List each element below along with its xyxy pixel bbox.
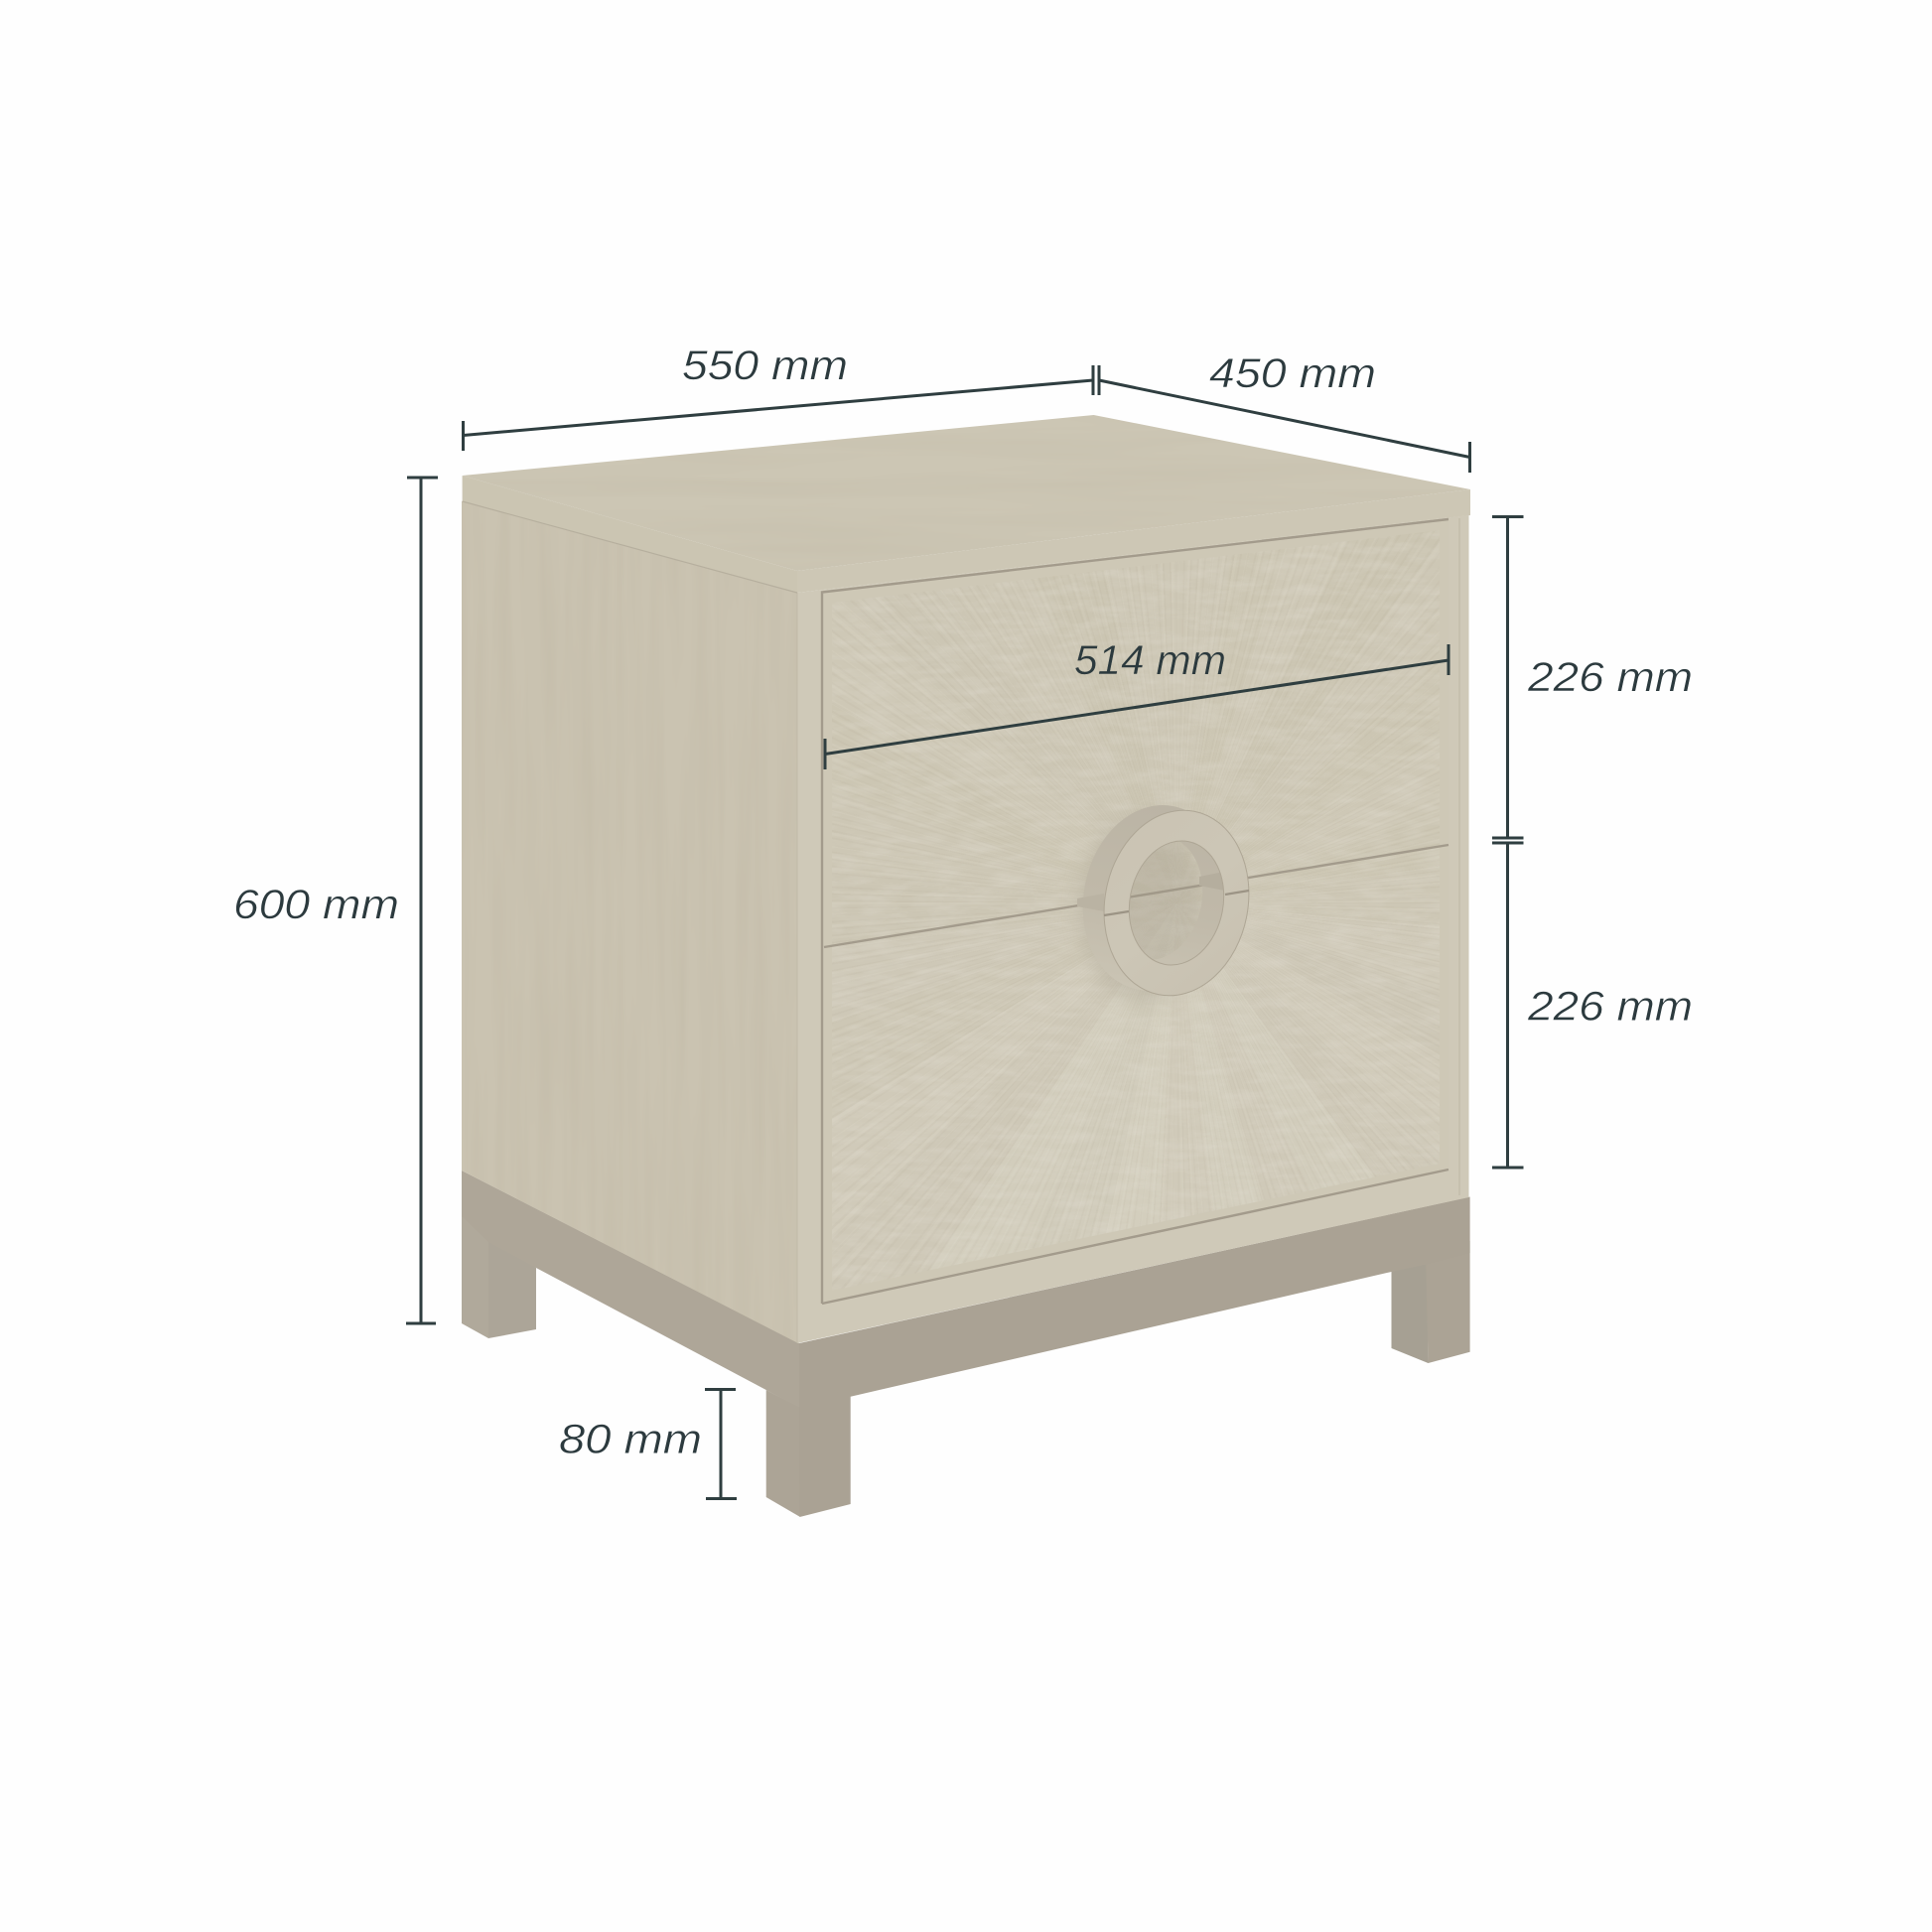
dimension: height 600 mm: 600 mm: [233, 881, 399, 927]
base rail: [462, 1171, 1470, 1408]
ring front face: [1088, 797, 1265, 1009]
dimension: upper drawer height 226 mm: 226 mm: [1527, 653, 1693, 700]
top slab: [462, 412, 1474, 593]
handle shadow: [1082, 817, 1205, 1000]
dimension: lower drawer height 226 mm: 226 mm: [1527, 983, 1693, 1029]
dimension: drawer width 514 mm: 514 mm: [1074, 636, 1226, 683]
right leg: [1392, 1241, 1470, 1363]
ring depth: [1067, 792, 1243, 1003]
cabinet side face: [462, 496, 799, 1350]
ring split: [1104, 891, 1249, 915]
cabinet frame lines: [463, 501, 1459, 1343]
drawer fronts sunburst veneer: [937, 989, 1253, 1269]
dimension: leg height 80 mm: [559, 1390, 737, 1499]
drawer outline: [822, 519, 1449, 1304]
dimension: depth 450 mm: [1099, 349, 1469, 473]
dimension: leg height 80 mm: 80 mm: [559, 1416, 702, 1461]
left leg: [462, 1191, 536, 1338]
dimension: width 550 mm: [463, 342, 1093, 451]
cabinet front face: [797, 515, 1469, 1343]
drawer panel background: [822, 519, 1449, 1304]
front leg: [766, 1390, 851, 1517]
dimension: width 550 mm: 550 mm: [682, 342, 848, 388]
dimension: drawer width 514 mm: [825, 636, 1449, 769]
ring handle: [1067, 792, 1265, 1009]
veneer mottling: [832, 521, 1440, 1296]
drawer lines and ring handle: [820, 518, 1449, 1305]
nightstand illustration: [462, 415, 1470, 1517]
dimension: depth 450 mm: 450 mm: [1209, 349, 1376, 396]
ring tabs: [1077, 872, 1225, 911]
cabinet body and base: [462, 415, 1470, 1517]
